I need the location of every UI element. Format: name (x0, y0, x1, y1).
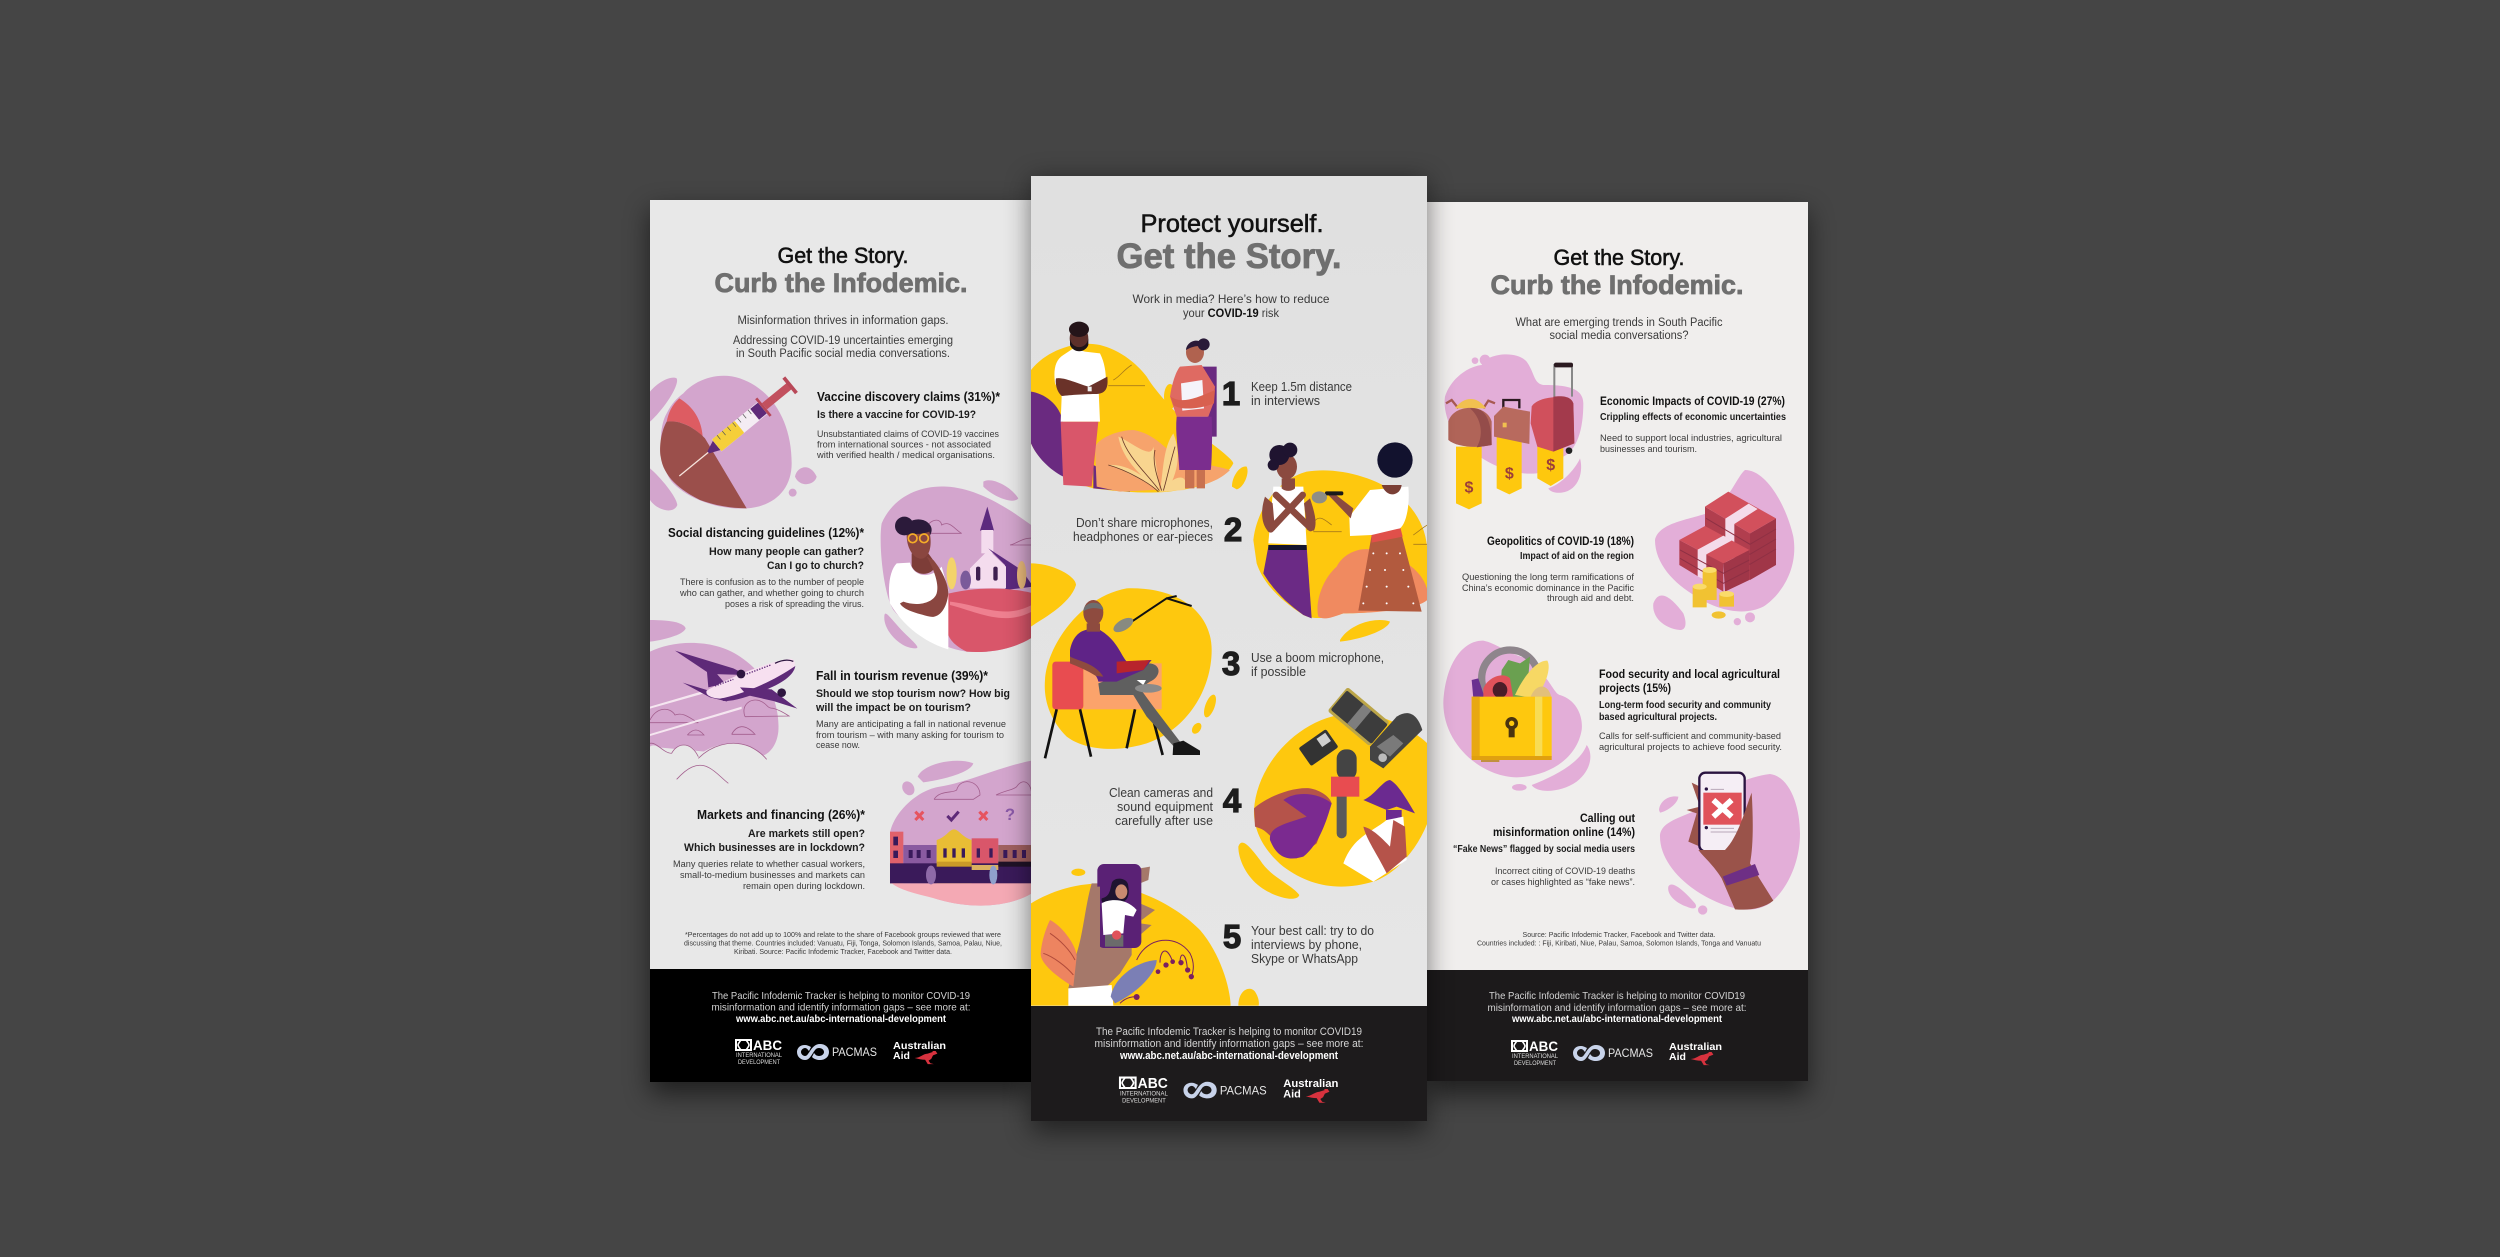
text block: food security: projects (15%) (1599, 683, 1671, 695)
footer band (1427, 970, 1808, 1081)
logos: DEVELOPMENT (1514, 1061, 1556, 1067)
source note: Countries included: : Fiji, Kiribati, Niue, Palau, Samoa, Solomon Islands, Tonga and Vanuatu (1477, 940, 1761, 948)
text block: social distancing guidelines: How many people can gather? (709, 546, 864, 558)
source note: Source: Pacific Infodemic Tracker, Facebook and Twitter data. (1522, 932, 1716, 939)
icon: padlock with food (1443, 641, 1590, 791)
step 4: Clean cameras and (1109, 786, 1213, 800)
text block: markets and financing: small-to-medium businesses and markets can (680, 870, 865, 880)
left poster illustrations upper (650, 375, 1033, 652)
title: Get the Story: Get the Story. (1116, 237, 1342, 276)
footnote: Kiribati. Source: Pacific Infodemic Tracker, Facebook and Twitter data. (734, 949, 952, 956)
title: Curb the Infodemic: Curb the Infodemic. (1490, 270, 1744, 300)
step 5: Your best call: try to do (1251, 924, 1374, 938)
footer band (1031, 1006, 1427, 1121)
step 1 (1222, 375, 1352, 412)
footnote (684, 932, 1002, 956)
logos: ABC (1138, 1076, 1168, 1092)
intro text: Misinformation thrives in information gaps. (738, 315, 948, 327)
right poster illustrations lower (1443, 641, 1800, 915)
step 2 (1073, 511, 1242, 548)
title: Curb the Infodemic: Curb the Infodemic. (714, 268, 968, 298)
logos: Aid (893, 1050, 910, 1062)
text block: vaccine discovery claims (816, 390, 1000, 460)
text block: social distancing guidelines: Can I go to church? (767, 560, 864, 572)
text block: fall in tourism revenue: will the impact be on tourism? (815, 702, 971, 714)
footer text: www.abc.net.au/abc-international-development (1511, 1013, 1722, 1025)
footnote: *Percentages do not add up to 100% and relate to the share of Facebook groups reviewed that were (685, 932, 1001, 939)
logos: PACMAS (1608, 1048, 1653, 1060)
text block: economic impacts: Need to support local industries, agricultural (1600, 433, 1782, 443)
text block: fall in tourism revenue: from tourism – with many asking for tourism to (816, 730, 1004, 740)
text block: social distancing guidelines (668, 526, 864, 609)
text block: social distancing guidelines: poses a risk of spreading the virus. (725, 599, 864, 609)
icon: stacks of money and coins (1653, 470, 1794, 630)
step 4: carefully after use (1115, 814, 1213, 828)
logos (1511, 1040, 1722, 1066)
center panel shadow (1031, 180, 1427, 1132)
footer text: misinformation and identify information gaps – see more at: (1094, 1038, 1364, 1050)
step 5: 5 (1223, 918, 1241, 955)
logos: Australian (893, 1040, 946, 1052)
text block: vaccine discovery claims: with verified health / medical organisations. (816, 450, 995, 460)
logos: Australian (1283, 1078, 1338, 1090)
logos: INTERNATIONAL (1120, 1090, 1168, 1097)
logos: Aid (1283, 1088, 1301, 1100)
text block: fall in tourism revenue (815, 669, 1010, 750)
step 1: Keep 1.5m distance (1251, 380, 1352, 394)
intro text (1516, 317, 1722, 339)
step 4: sound equipment (1117, 800, 1214, 814)
text block: geopolitics: China’s economic dominance in the Pacific (1462, 583, 1634, 593)
step 3: if possible (1251, 665, 1306, 679)
step 3: 3 (1222, 645, 1240, 682)
text block: markets and financing: remain open during lockdown. (743, 881, 865, 891)
intro text (1132, 292, 1330, 320)
title: Protect yourself: Protect yourself. (1140, 210, 1324, 238)
footer band (650, 969, 1031, 1082)
text block: markets and financing: Markets and financing (26%)* (697, 808, 865, 822)
footer text: misinformation and identify information gaps – see more at: (1488, 1002, 1746, 1014)
logos: Australian (1669, 1041, 1722, 1053)
text block: geopolitics: Questioning the long term ramifications of (1462, 572, 1635, 582)
title: Get the Story: Get the Story. (778, 243, 908, 268)
icon: bags and suitcase with dollar ribbons: $ (1505, 466, 1514, 483)
text block: fall in tourism revenue: Should we stop tourism now? How big (816, 688, 1010, 700)
intro text: Work in media? Here’s how to reduce (1132, 292, 1330, 306)
panel: emerging trends right poster (1427, 202, 1808, 1081)
text block: economic impacts: businesses and tourism. (1600, 444, 1697, 454)
text block: vaccine discovery claims: Is there a vaccine for COVID-19? (817, 409, 976, 421)
text block: markets and financing: Are markets still open? (748, 828, 865, 840)
icon: woman thinking with church (881, 480, 1033, 652)
text block: geopolitics: Impact of aid on the region (1520, 551, 1634, 562)
icon: camera, recorder, microphone, cleaning (1238, 687, 1427, 899)
step 5: Skype or WhatsApp (1251, 952, 1358, 966)
text block: food security: agricultural projects to achieve food security. (1599, 742, 1782, 752)
logos: INTERNATIONAL (736, 1053, 783, 1059)
icon: vaccine syringe and arm (650, 375, 817, 510)
text block: calling out misinformation: “Fake News” flagged by social media users (1453, 844, 1635, 855)
text block: markets and financing: Which businesses are in lockdown? (684, 842, 865, 854)
logos: PACMAS (1220, 1083, 1267, 1097)
intro text: in South Pacific social media conversations. (736, 348, 950, 360)
logos: ABC (1529, 1038, 1558, 1054)
footer text (1488, 990, 1746, 1025)
footer text: misinformation and identify information gaps – see more at: (712, 1002, 970, 1014)
text block: food security: based agricultural projects. (1599, 712, 1717, 723)
text block: calling out misinformation (1453, 813, 1635, 887)
logos (1120, 1076, 1338, 1105)
intro text: social media conversations? (1550, 330, 1688, 342)
text block: calling out misinformation: misinformation online (14%) (1493, 827, 1635, 839)
step 5 (1223, 918, 1374, 966)
logos: DEVELOPMENT (1122, 1098, 1166, 1105)
text block: food security (1599, 669, 1782, 752)
text block: fall in tourism revenue: Many are anticipating a fall in national revenue (816, 719, 1006, 729)
step 2: headphones or ear-pieces (1073, 530, 1213, 544)
step 3: Use a boom microphone, (1251, 651, 1384, 665)
icon: two people keeping distance (1031, 322, 1248, 493)
icon: hand holding phone with red cross (1659, 773, 1800, 915)
text block: social distancing guidelines: who can gather, and whether going to church (679, 588, 864, 598)
footer text: www.abc.net.au/abc-international-development (1119, 1050, 1338, 1062)
text block: markets and financing (673, 808, 865, 891)
text block: geopolitics: Geopolitics of COVID-19 (18%) (1487, 536, 1634, 548)
logos: PACMAS (832, 1047, 877, 1059)
step 1: 1 (1222, 375, 1240, 412)
text block: calling out misinformation: Incorrect citing of COVID-19 deaths (1495, 866, 1635, 876)
footer text: The Pacific Infodemic Tracker is helping to monitor COVID19 (1489, 990, 1745, 1002)
intro text: What are emerging trends in South Pacific (1516, 317, 1723, 329)
step 3 (1222, 645, 1384, 682)
intro text: Addressing COVID-19 uncertainties emerging (733, 335, 953, 347)
text block: geopolitics: through aid and debt. (1547, 593, 1634, 603)
right poster illustrations upper (1445, 354, 1794, 630)
text block: calling out misinformation: or cases highlighted as “fake news”. (1491, 877, 1635, 887)
icon: shopfronts with crosses and tick (890, 761, 1032, 906)
text block: economic impacts: Economic Impacts of COVID-19 (27%) (1600, 396, 1785, 408)
icon: hand holding phone on video call (1031, 864, 1259, 1006)
panel: curb the infodemic left poster (650, 200, 1033, 1082)
text block: food security: Long-term food security and community (1599, 700, 1771, 711)
left poster illustrations lower (650, 620, 1032, 906)
text block: fall in tourism revenue: Fall in tourism revenue (39%)* (816, 669, 988, 683)
footer text: The Pacific Infodemic Tracker is helping to monitor COVID19 (1096, 1026, 1362, 1038)
step 2: 2 (1224, 511, 1242, 548)
icon: man seated with boom microphone (1031, 563, 1390, 758)
text block: vaccine discovery claims: Vaccine discovery claims (31%)* (817, 390, 1000, 404)
text block: social distancing guidelines: There is confusion as to the number of people (680, 577, 864, 587)
icon: bags and suitcase with dollar ribbons: $ (1546, 457, 1555, 474)
panel: protect yourself center poster (1031, 176, 1427, 1121)
icon: shopfronts with crosses and tick: ? (1005, 805, 1015, 824)
text block: food security: Calls for self-sufficient and community-based (1599, 731, 1781, 741)
text block: social distancing guidelines: Social distancing guidelines (12%)* (668, 526, 864, 540)
footer text: The Pacific Infodemic Tracker is helping to monitor COVID-19 (712, 990, 970, 1002)
text block: fall in tourism revenue: cease now. (816, 740, 860, 750)
logos: Aid (1669, 1051, 1686, 1063)
step 4: 4 (1223, 782, 1242, 819)
panel shadows (650, 210, 1808, 1094)
title: Get the Story: Get the Story. (1554, 245, 1684, 270)
step 4 (1109, 782, 1242, 828)
intro text (733, 315, 953, 360)
text block: economic impacts: Crippling effects of economic uncertainties (1600, 412, 1786, 423)
footer text: www.abc.net.au/abc-international-development (735, 1013, 946, 1025)
icon: bags and suitcase with dollar ribbons: $ (1465, 480, 1474, 497)
icon: plane in clouds (650, 620, 797, 783)
logos: ABC (753, 1037, 782, 1053)
text block: food security: Food security and local agricultural (1599, 669, 1780, 681)
footnote: discussing that theme. Countries included: Vanuatu, Fiji, Tonga, Solomon Islands, Samoa, Palau, Niue, (684, 940, 1002, 948)
logos (735, 1039, 946, 1064)
text block: calling out misinformation: Calling out (1580, 813, 1635, 825)
center poster illustrations (1031, 322, 1427, 1006)
icon: two women with shared microphone warning (1253, 442, 1427, 618)
step 2: Don’t share microphones, (1076, 516, 1213, 530)
text block: markets and financing: Many queries relate to whether casual workers, (673, 859, 865, 869)
text block: vaccine discovery claims: from international sources - not associated (817, 440, 991, 450)
footer text (712, 990, 970, 1025)
logos: DEVELOPMENT (738, 1060, 780, 1066)
source note (1477, 932, 1761, 948)
icon: bags and suitcase with dollar ribbons (1445, 354, 1583, 509)
logos: INTERNATIONAL (1512, 1054, 1559, 1060)
text block: economic impacts (1600, 396, 1786, 454)
footer text (1094, 1026, 1364, 1062)
text block: geopolitics (1462, 536, 1635, 603)
step 1: in interviews (1251, 394, 1320, 408)
step 5: interviews by phone, (1251, 938, 1362, 952)
text block: vaccine discovery claims: Unsubstantiated claims of COVID-19 vaccines (817, 429, 999, 439)
intro text: your COVID-19 risk (1183, 306, 1280, 320)
